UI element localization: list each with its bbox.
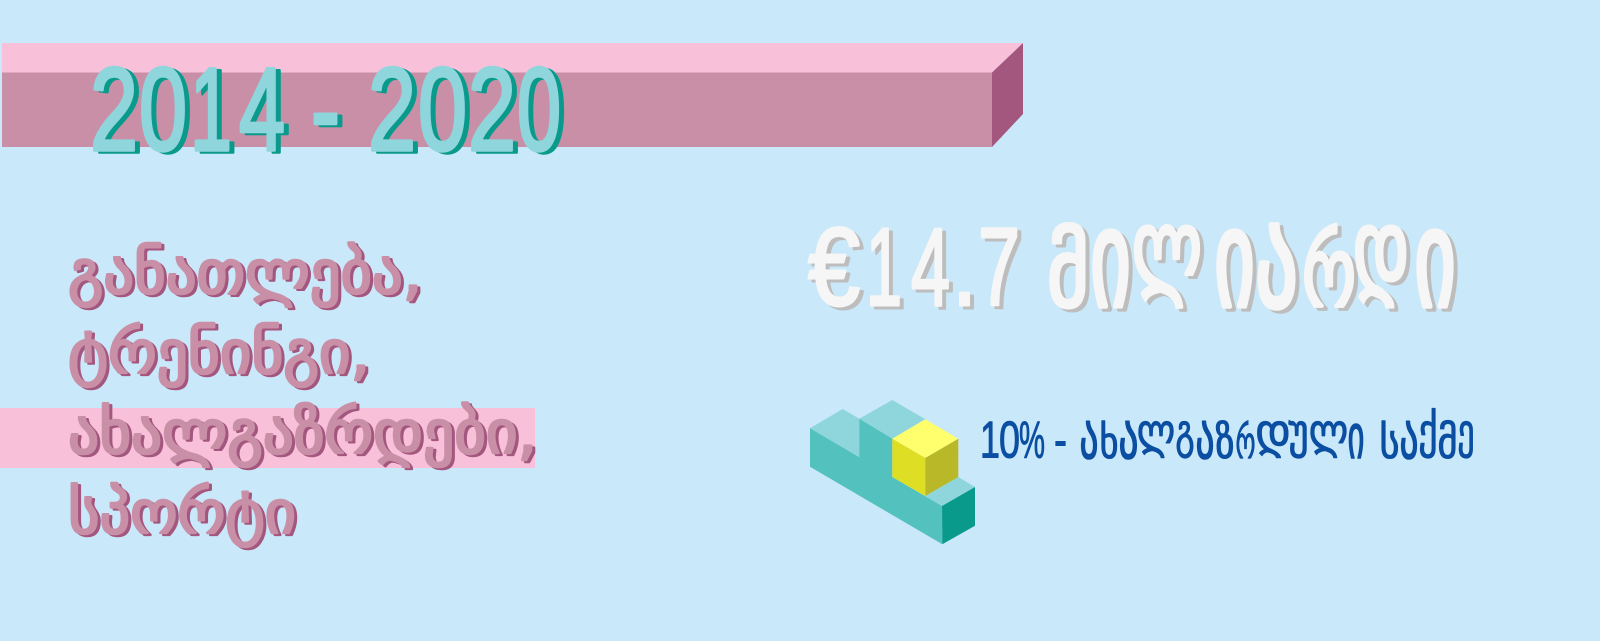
title: years (90, 44, 561, 176)
budget amount: მ (1047, 216, 1089, 330)
3D bar banner (2, 43, 1023, 147)
topics text block: ტრენინგი, (68, 318, 370, 388)
youth share label: % (1019, 412, 1045, 470)
title: years: 4 (239, 44, 285, 176)
title: years: - (311, 44, 340, 176)
youth share label: ე (1458, 404, 1474, 458)
youth share label: 1 (980, 412, 1000, 470)
title: years: 1 (190, 44, 232, 176)
title: years: 2 (90, 44, 138, 176)
icon: isometric blocks (810, 400, 975, 544)
youth share label (980, 400, 1474, 473)
highlight strip (0, 408, 535, 468)
youth share label: უ (1288, 404, 1308, 458)
title: years: 0 (418, 44, 467, 176)
youth share label: ი (1348, 400, 1364, 473)
youth share label: გ (1176, 404, 1194, 458)
youth share label: ქ (1418, 404, 1438, 458)
topics text block (68, 238, 537, 548)
budget amount: ლ (1132, 188, 1202, 307)
topics text block: ახალგაზრდები, (68, 398, 537, 468)
title: years: 0 (517, 44, 561, 176)
youth share label: ა (1080, 400, 1098, 473)
budget amount: რ (1302, 216, 1356, 330)
budget amount: 4 (911, 206, 950, 329)
youth share label: ს (1380, 418, 1400, 469)
topics text block: განათლება, (68, 238, 422, 308)
title: years: 2 (368, 44, 416, 176)
title: years: 0 (139, 44, 187, 176)
youth share label: ლ (1309, 404, 1348, 458)
budget amount (808, 180, 1456, 339)
budget amount: € (808, 206, 860, 329)
budget amount: დ (1353, 188, 1409, 307)
budget amount: ი (1214, 180, 1255, 339)
youth share label: ლ (1137, 404, 1175, 458)
youth share label: 0 (999, 412, 1020, 470)
topics text block: სპორტი (68, 478, 296, 548)
budget amount: ი (1414, 180, 1456, 339)
youth share label: - (1054, 412, 1067, 470)
youth share label: ზ (1216, 418, 1234, 469)
budget amount: 7 (978, 206, 1020, 329)
budget amount: ი (1090, 180, 1131, 339)
youth share label: ხ (1100, 418, 1118, 469)
youth share label: ა (1196, 400, 1214, 473)
title: years: 2 (468, 44, 516, 176)
youth share label: მ (1438, 418, 1458, 469)
budget amount: 1 (866, 206, 902, 329)
youth share label: ა (1118, 400, 1138, 473)
youth share label: ა (1400, 400, 1418, 473)
budget amount: ა (1255, 180, 1298, 339)
budget amount: . (952, 206, 977, 329)
youth share label: რ (1236, 418, 1256, 469)
youth share label: დ (1256, 404, 1290, 458)
